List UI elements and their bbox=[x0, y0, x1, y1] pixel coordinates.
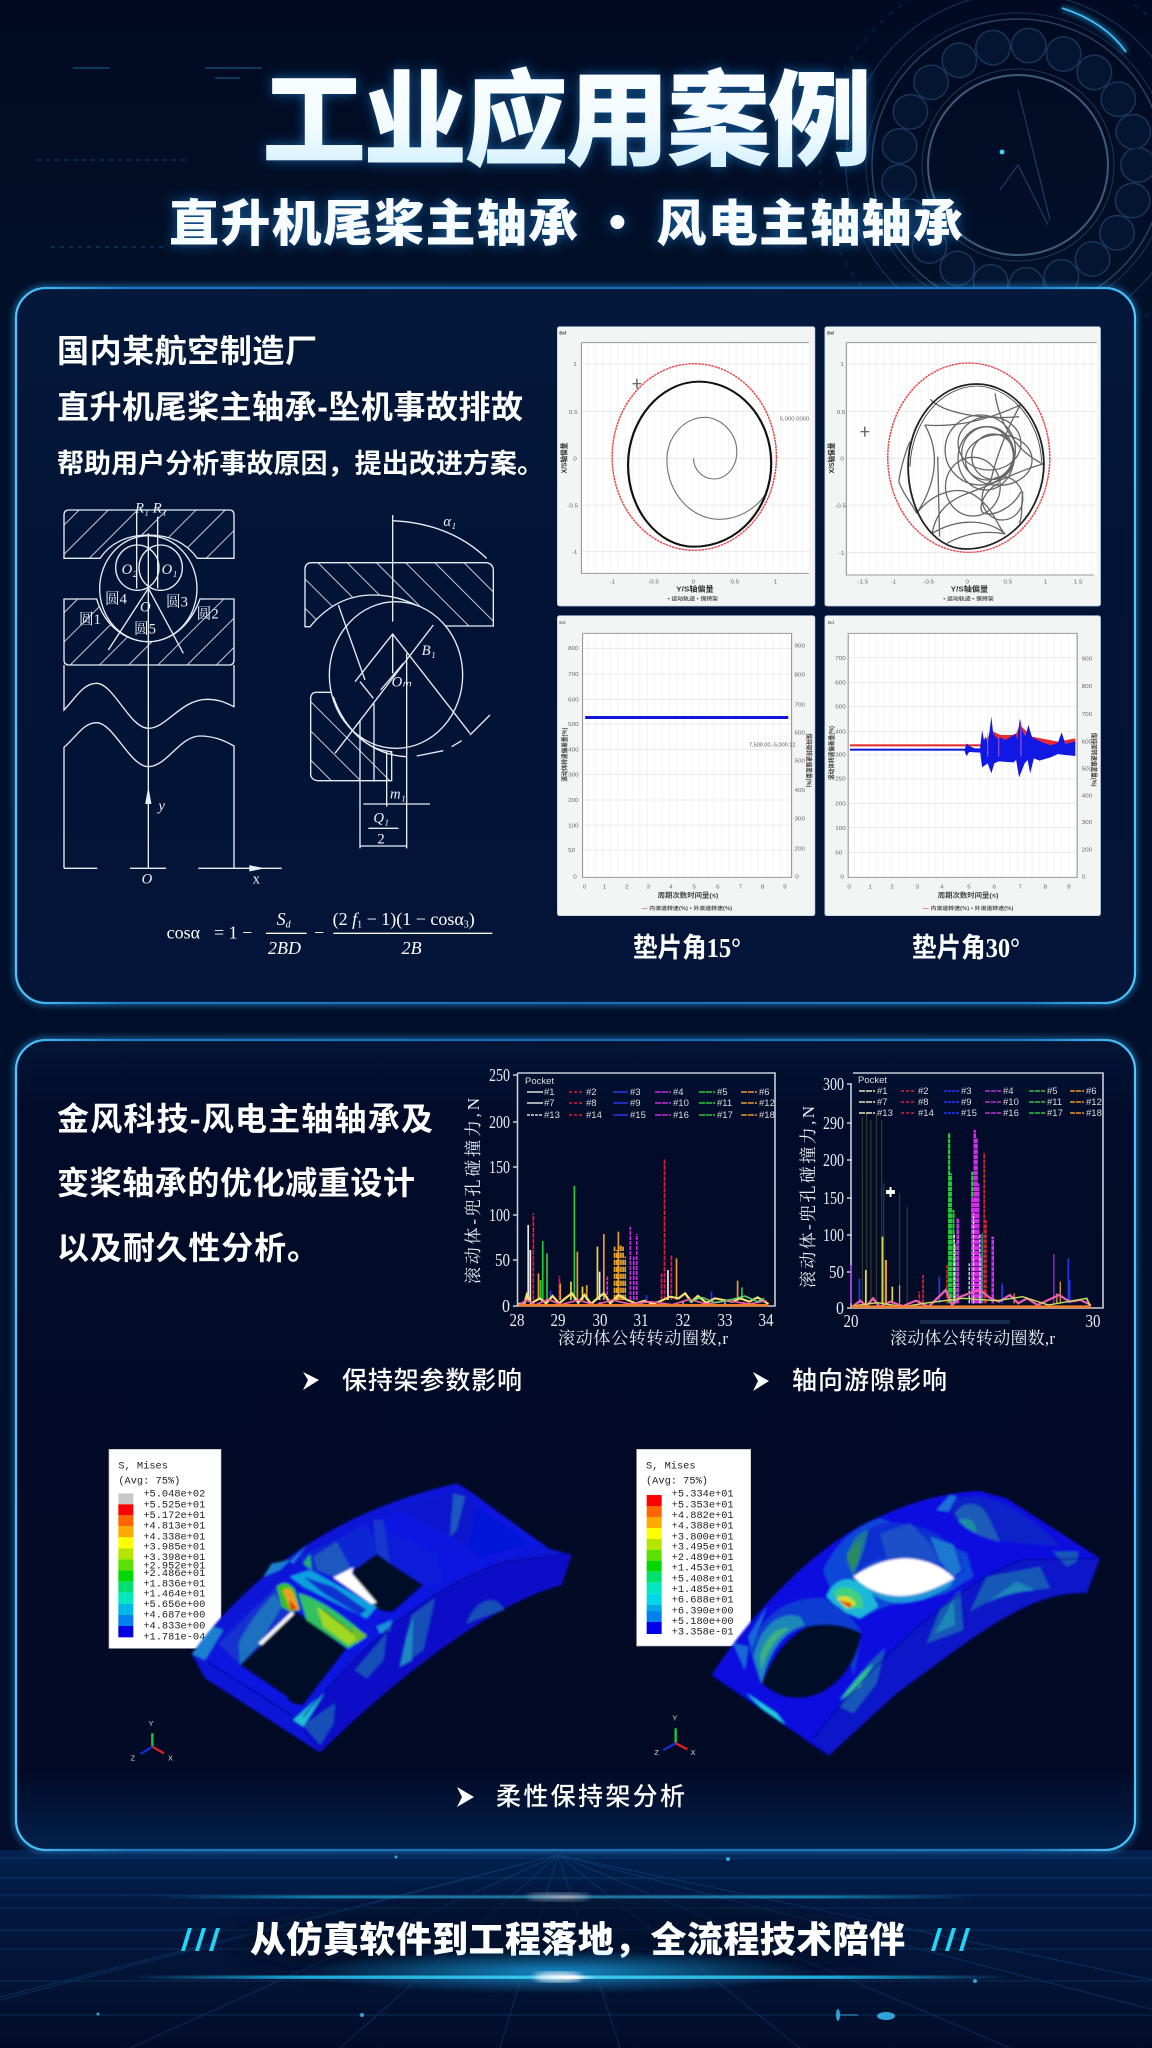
chart: cage parameter collision force: 32 bbox=[676, 1310, 690, 1330]
chart: speed trace, spacer angle 30 bbox=[825, 616, 1100, 916]
chart: speed trace, spacer angle 30: 4 bbox=[940, 885, 944, 891]
text: wind bearing description: 变桨轴承的优化减重设计 bbox=[57, 1165, 415, 1201]
chart: speed trace, spacer angle 15: 200 bbox=[568, 798, 579, 804]
chart: cage parameter collision force: #8 bbox=[586, 1098, 597, 1109]
legend: contour scale right: +1.485e+01 bbox=[672, 1584, 734, 1596]
legend: contour scale left: (Avg: 75%) bbox=[118, 1475, 180, 1487]
chart: speed trace, spacer angle 30: 8 bbox=[1044, 885, 1048, 891]
bullet: flexible cage analysis: 柔性保持架分析 bbox=[496, 1783, 685, 1811]
chart: speed trace, spacer angle 15: 2 bbox=[625, 885, 629, 891]
formula: 2BD bbox=[268, 938, 301, 958]
legend: contour scale right: +5.408e+01 bbox=[672, 1573, 734, 1585]
chart: axial clearance collision force: #11 bbox=[1047, 1097, 1062, 1108]
legend: contour scale left: +1.781e-04 bbox=[143, 1632, 205, 1644]
chart: speed trace, spacer angle 30: 50 bbox=[835, 851, 843, 857]
chart: speed trace, spacer angle 15: 0 bbox=[573, 875, 577, 880]
chart: axial clearance collision force: 滚动体公转转动圈数,r bbox=[890, 1329, 1055, 1348]
chart: axial clearance collision force: #12 bbox=[1086, 1097, 1102, 1108]
chart: cage parameter collision force: #7 bbox=[544, 1098, 555, 1109]
chart: orbit, spacer angle 30: 0 bbox=[840, 457, 845, 463]
slogan glow bbox=[228, 1898, 888, 1982]
chart: speed trace, spacer angle 30: 100 bbox=[835, 826, 846, 832]
chart: orbit, spacer angle 15: -1 bbox=[610, 580, 616, 585]
diagram: contact angle cross-section bbox=[305, 514, 493, 848]
formula: S bbox=[277, 909, 286, 929]
perspective floor grid bbox=[0, 1855, 1152, 2048]
chart: cage parameter collision force: #14 bbox=[586, 1110, 602, 1121]
legend: contour scale right: +3.495e+01 bbox=[672, 1542, 734, 1554]
chart: speed trace, spacer angle 30: 700 bbox=[1082, 712, 1093, 718]
text: wind bearing description: 以及耐久性分析。 bbox=[57, 1230, 319, 1266]
chart: cage parameter collision force: #17 bbox=[717, 1110, 733, 1121]
chart: speed trace, spacer angle 30: Bd bbox=[828, 620, 834, 626]
legend: contour scale left: +3.398e+01 bbox=[143, 1552, 205, 1564]
legend: contour scale right: +3.358e-01 bbox=[672, 1627, 734, 1639]
chart: speed trace, spacer angle 15: 0 bbox=[795, 875, 799, 880]
chart: cage parameter collision force: #13 bbox=[544, 1110, 560, 1121]
chart: orbit, spacer angle 15: -0.5 bbox=[567, 504, 579, 509]
chart: axial clearance collision force: #13 bbox=[877, 1108, 893, 1119]
chart: cage parameter collision force: 滚动体-兜孔碰撞力,N bbox=[464, 1098, 483, 1284]
chart: axial clearance collision force: #18 bbox=[1086, 1108, 1102, 1119]
heading: factory: 国内某航空制造厂 bbox=[57, 333, 317, 369]
chart: speed trace, spacer angle 15: 滚动体转速偏差量(%) bbox=[560, 728, 569, 782]
chart: orbit, spacer angle 30: -1 bbox=[891, 580, 897, 585]
diagram: bearing groove cross-section: 圆3 bbox=[166, 594, 188, 611]
chart: orbit, spacer angle 15: • 运动轨迹 • 保持架 bbox=[668, 595, 718, 603]
chart: speed trace, spacer angle 30: 300 bbox=[835, 753, 846, 759]
chart: speed trace, spacer angle 30: 3 bbox=[916, 885, 920, 891]
formula: ) bbox=[469, 909, 475, 930]
chart: cage parameter collision force: #16 bbox=[673, 1110, 689, 1121]
axis triad right bbox=[654, 1714, 696, 1757]
chart: orbit, spacer angle 30: 0.5 bbox=[1004, 580, 1013, 585]
legend: contour scale left: +5.048e+02 bbox=[143, 1489, 205, 1501]
chart: cage parameter collision force: #18 bbox=[759, 1110, 775, 1121]
formula: cosα bbox=[167, 922, 201, 942]
chart: orbit, spacer angle 30: -0.5 bbox=[923, 580, 935, 585]
chart: speed trace, spacer angle 30: 500 bbox=[835, 705, 846, 711]
chart: cage parameter collision force: 0 bbox=[502, 1296, 510, 1316]
slogan top rule bbox=[154, 1893, 977, 1901]
chart: axial clearance collision force: 50 bbox=[829, 1262, 844, 1282]
diagram: contact angle cross-section: Q₁ bbox=[373, 811, 389, 827]
legend: contour scale right: +5.353e+01 bbox=[672, 1499, 734, 1511]
chart: speed trace, spacer angle 15: 700 bbox=[795, 703, 806, 709]
chart: orbit, spacer angle 15: -1 bbox=[572, 550, 578, 556]
chart: speed trace, spacer angle 30: 周期次数时间量(s) bbox=[938, 891, 998, 899]
chart: speed trace, spacer angle 15: 300 bbox=[795, 817, 806, 823]
chart: speed trace, spacer angle 30: 400 bbox=[835, 730, 846, 735]
chart: speed trace, spacer angle 30: 5 bbox=[967, 885, 972, 891]
legend: contour scale right: +3.800e+01 bbox=[672, 1531, 734, 1543]
diagram: contact angle cross-section: 2 bbox=[377, 831, 385, 847]
icon: right slashes bbox=[931, 1928, 970, 1951]
decorative light streaks bbox=[37, 68, 262, 247]
chart: orbit, spacer angle 30: -1 bbox=[839, 551, 845, 557]
text: purpose: 帮助用户分析事故原因，提出改进方案。 bbox=[57, 442, 544, 481]
axis triad left: Z bbox=[131, 1754, 136, 1763]
text: wind bearing description bbox=[57, 1101, 433, 1266]
diagram: bearing groove cross-section bbox=[64, 501, 282, 887]
legend: contour scale left: +1.464e+01 bbox=[143, 1589, 205, 1601]
diagram: contact angle cross-section: B₁ bbox=[422, 643, 436, 659]
bullet: axial clearance influence: 轴向游隙影响 bbox=[792, 1367, 947, 1395]
chart: speed trace, spacer angle 30: 300 bbox=[1082, 820, 1093, 826]
chart: axial clearance collision force: #7 bbox=[877, 1097, 888, 1108]
chart: orbit, spacer angle 15: 0.5 bbox=[731, 580, 740, 585]
legend: contour scale right: +6.688e+01 bbox=[672, 1595, 734, 1607]
legend: contour scale left: +4.687e+00 bbox=[143, 1610, 205, 1622]
chart: speed trace, spacer angle 15: 600 bbox=[568, 698, 579, 703]
chart: cage parameter collision force: 31 bbox=[634, 1310, 648, 1330]
chart: cage parameter collision force: #11 bbox=[717, 1098, 732, 1109]
chart: axial clearance collision force: #8 bbox=[918, 1097, 929, 1108]
legend: contour scale left: +5.172e+01 bbox=[143, 1510, 205, 1522]
chart: cage parameter collision force: #2 bbox=[586, 1087, 597, 1098]
chart: speed trace, spacer angle 15: 300 bbox=[568, 773, 579, 779]
chart: axial clearance collision force: #10 bbox=[1003, 1097, 1019, 1108]
chart: speed trace, spacer angle 30: 600 bbox=[835, 681, 846, 687]
chart: axial clearance collision force: 20 bbox=[844, 1311, 858, 1331]
legend: contour scale right: +1.453e+01 bbox=[672, 1563, 734, 1575]
legend: contour scale left: +5.656e+00 bbox=[143, 1599, 205, 1611]
chart: cage parameter collision force: #15 bbox=[630, 1110, 646, 1121]
text: wind bearing description: 金风科技-风电主轴轴承及 bbox=[57, 1101, 433, 1137]
chart: speed trace, spacer angle 30: 900 bbox=[1082, 657, 1093, 663]
chart: orbit, spacer angle 30: • 运动轨迹 • 保持架 bbox=[943, 595, 994, 603]
chart: speed trace, spacer angle 30: 2 bbox=[890, 885, 895, 891]
legend: contour scale right: +4.882e+01 bbox=[672, 1510, 734, 1522]
formula: 1 bbox=[357, 920, 362, 931]
title: 工业应用案例 bbox=[262, 36, 872, 187]
chart: speed trace, spacer angle 30: 250 bbox=[835, 777, 846, 783]
legend: contour scale left: S, Mises bbox=[118, 1461, 168, 1473]
chart: orbit, spacer angle 30: 1.5 bbox=[1074, 580, 1083, 585]
chart: speed trace, spacer angle 30: 0 bbox=[840, 875, 845, 880]
legend: contour scale left: +4.813e+01 bbox=[143, 1521, 205, 1533]
chart: cage parameter collision force: Pocket bbox=[525, 1076, 554, 1087]
axis triad left bbox=[131, 1719, 173, 1763]
chart: speed trace, spacer angle 30: 1 bbox=[869, 885, 873, 891]
chart: orbit, spacer angle 15: X/S轴偏量 bbox=[559, 443, 569, 473]
chart: speed trace, spacer angle 30: 滚动体转速偏差量(%) bbox=[827, 726, 835, 780]
chart: orbit, spacer angle 30: 0.5 bbox=[837, 410, 846, 416]
axis triad left: X bbox=[168, 1754, 173, 1763]
diagram: bearing groove cross-section: 圆4 bbox=[105, 590, 128, 607]
chart: speed trace, spacer angle 30: 7 bbox=[1018, 885, 1023, 891]
legend: contour scale left: +4.833e+00 bbox=[143, 1620, 205, 1632]
chart: speed trace, spacer angle 30: 保持架转速偏差量(%) bbox=[1090, 733, 1098, 787]
chart: axial clearance collision force: #2 bbox=[918, 1086, 929, 1097]
chart: orbit, spacer angle 30: X/S轴偏量 bbox=[827, 443, 836, 473]
axis triad right: X bbox=[691, 1748, 696, 1757]
chart: cage parameter collision force: #4 bbox=[673, 1087, 684, 1098]
chart: cage parameter collision force: 28 bbox=[510, 1310, 524, 1330]
chart: orbit, spacer angle 15: 5,000 0000 bbox=[780, 417, 809, 423]
slogan bottom rule bbox=[130, 1950, 1010, 1994]
chart: speed trace, spacer angle 15: 5 bbox=[692, 885, 697, 891]
diagram: bearing groove cross-section: O bbox=[142, 871, 153, 887]
chart: orbit, spacer angle 30 bbox=[825, 327, 1100, 606]
chart: axial clearance collision force: #6 bbox=[1086, 1086, 1097, 1097]
chart: orbit, spacer angle 15: 1 bbox=[573, 362, 577, 368]
slogan: 从仿真软件到工程落地，全流程技术陪伴 bbox=[250, 1911, 905, 1963]
chart: speed trace, spacer angle 15: 400 bbox=[568, 748, 579, 753]
chart: cage parameter collision force: #3 bbox=[630, 1087, 641, 1098]
chart: speed trace, spacer angle 15: 700 bbox=[568, 672, 579, 678]
chart: speed trace, spacer angle 15: 800 bbox=[795, 673, 806, 679]
chart: speed trace, spacer angle 15: 8 bbox=[761, 885, 765, 891]
formula: = 1 − bbox=[214, 922, 252, 942]
chart: speed trace, spacer angle 15: 600 bbox=[795, 731, 806, 737]
caption: spacer angle 15: 垫片角15° bbox=[633, 933, 741, 963]
icon: left slashes bbox=[181, 1928, 220, 1951]
chart: axial clearance collision force: 0 bbox=[836, 1298, 844, 1318]
chart: speed trace, spacer angle 15: 保持架转速偏差量(%) bbox=[805, 733, 813, 787]
legend: contour scale left: +3.985e+01 bbox=[143, 1542, 205, 1554]
caption: spacer angle 30: 垫片角30° bbox=[912, 933, 1020, 963]
panel: helicopter bearing case bbox=[16, 288, 1135, 1003]
legend: contour scale left: +2.952e+01 bbox=[143, 1561, 205, 1573]
chart: axial clearance collision force: 30 bbox=[1086, 1311, 1100, 1331]
chart: orbit, spacer angle 15: -0.5 bbox=[648, 580, 660, 585]
chart: speed trace, spacer angle 30: 500 bbox=[1082, 767, 1093, 773]
legend: contour scale right: +2.489e+01 bbox=[672, 1552, 734, 1564]
chart: axial clearance collision force: #3 bbox=[961, 1086, 972, 1097]
formula: 2B bbox=[402, 938, 422, 958]
chart: speed trace, spacer angle 15: 200 bbox=[795, 847, 806, 853]
bullet: cage parameter influence: 保持架参数影响 bbox=[342, 1367, 522, 1395]
chart: orbit, spacer angle 15 bbox=[557, 327, 815, 606]
chart: speed trace, spacer angle 30: 700 bbox=[835, 656, 846, 662]
chart: speed trace, spacer angle 15: 6 bbox=[716, 885, 720, 891]
axis triad left: Y bbox=[149, 1719, 154, 1728]
chart: speed trace, spacer angle 30: 9 bbox=[1067, 885, 1071, 891]
chart: speed trace, spacer angle 15 bbox=[557, 616, 815, 916]
chart: speed trace, spacer angle 15: 900 bbox=[795, 644, 806, 649]
chart: cage parameter collision force: #6 bbox=[759, 1087, 770, 1098]
formula: 3 bbox=[464, 920, 469, 931]
chart: axial clearance collision force: #15 bbox=[961, 1108, 977, 1119]
subtitle: 直升机尾桨主轴承 · 风电主轴轴承 bbox=[169, 184, 963, 256]
chart: speed trace, spacer angle 15: 1 bbox=[603, 885, 607, 891]
cage body right bbox=[712, 1491, 1100, 1756]
chart: cage parameter collision force: 200 bbox=[489, 1112, 510, 1132]
chart: speed trace, spacer angle 15: Bd bbox=[559, 620, 566, 626]
chart: speed trace, spacer angle 15: 4 bbox=[669, 885, 673, 891]
diagram: bearing groove cross-section: 圆1 bbox=[79, 611, 101, 628]
formula: − bbox=[314, 922, 324, 942]
chart: speed trace, spacer angle 15: 7,500.00,-5,000.12 bbox=[749, 743, 796, 749]
heading: accident investigation: 直升机尾桨主轴承-坠机事故排故 bbox=[57, 389, 523, 425]
chart: speed trace, spacer angle 15: 100 bbox=[568, 824, 579, 829]
chart: speed trace, spacer angle 15: 9 bbox=[783, 885, 787, 891]
chart: cage parameter collision force: 34 bbox=[758, 1310, 774, 1330]
chart: orbit, spacer angle 30: -1.5 bbox=[857, 580, 869, 585]
chart: speed trace, spacer angle 15: — 内滚道转速(%) • 外滚道转速(%) bbox=[642, 904, 732, 912]
chart: orbit, spacer angle 15: Bd bbox=[559, 331, 566, 337]
chart: speed trace, spacer angle 30: 600 bbox=[1082, 740, 1093, 745]
chart: axial clearance collision force: 100 bbox=[823, 1225, 844, 1245]
chart: speed trace, spacer angle 30: 6 bbox=[992, 885, 997, 891]
chart: cage parameter collision force: 33 bbox=[718, 1310, 732, 1330]
chart: cage parameter collision force: 50 bbox=[495, 1250, 510, 1270]
chart: cage parameter collision force: #10 bbox=[673, 1098, 689, 1109]
chart: cage parameter collision force: #5 bbox=[717, 1087, 728, 1098]
chart: axial clearance collision force: #1 bbox=[877, 1086, 888, 1097]
chart: speed trace, spacer angle 30: 200 bbox=[835, 802, 846, 807]
chart: orbit, spacer angle 15: 0 bbox=[692, 580, 696, 585]
chart: cage parameter collision force: 150 bbox=[489, 1157, 510, 1177]
axis triad right: Z bbox=[654, 1748, 659, 1757]
chart: axial clearance collision force: #14 bbox=[918, 1108, 934, 1119]
chart: axial clearance collision force: Pocket bbox=[858, 1075, 887, 1086]
legend: contour scale right: +6.390e+00 bbox=[672, 1605, 734, 1617]
chart: orbit, spacer angle 15: Y/S轴偏量 bbox=[676, 584, 714, 593]
chart: cage parameter collision force: #9 bbox=[630, 1098, 641, 1109]
floor background bbox=[0, 1850, 1152, 2048]
chart: cage parameter collision force: 29 bbox=[550, 1310, 566, 1330]
formula bbox=[167, 909, 492, 958]
chart: cage parameter collision force bbox=[464, 1065, 775, 1348]
decorative bearing graphic bbox=[820, 0, 1152, 363]
chart: orbit, spacer angle 30: 1 bbox=[1044, 580, 1048, 585]
chart: cage parameter collision force: 100 bbox=[489, 1205, 510, 1225]
legend: contour scale left bbox=[109, 1449, 221, 1648]
diagram: contact angle cross-section: Oₘ bbox=[392, 675, 412, 691]
chart: cage parameter collision force: 250 bbox=[489, 1065, 510, 1085]
legend: contour scale right bbox=[637, 1449, 751, 1646]
axis triad right: Y bbox=[672, 1714, 677, 1723]
chart: axial clearance collision force: #17 bbox=[1047, 1108, 1063, 1119]
legend: contour scale left: +1.836e+01 bbox=[143, 1579, 205, 1591]
chart: speed trace, spacer angle 15: 3 bbox=[647, 885, 651, 891]
chart: speed trace, spacer angle 15: 0 bbox=[583, 885, 587, 891]
formula: − 1)(1 − cosα bbox=[362, 909, 464, 930]
formula: (2 f bbox=[333, 909, 357, 929]
panel: wind turbine bearing case bbox=[16, 1040, 1135, 1850]
diagram: bearing groove cross-section: y bbox=[156, 799, 165, 815]
chart: axial clearance collision force: #5 bbox=[1047, 1086, 1058, 1097]
chart: orbit, spacer angle 30: Y/S轴偏量 bbox=[951, 584, 988, 593]
chart: speed trace, spacer angle 30: 0 bbox=[1082, 875, 1086, 880]
chart: speed trace, spacer angle 30: 200 bbox=[1082, 848, 1093, 853]
chart: cage parameter collision force: 滚动体公转转动圈数,r bbox=[558, 1329, 728, 1348]
chart: orbit, spacer angle 15: 0 bbox=[573, 457, 577, 463]
chart: cage parameter collision force: #12 bbox=[759, 1098, 775, 1109]
legend: contour scale right: +5.334e+01 bbox=[672, 1489, 734, 1501]
chart: speed trace, spacer angle 15: 50 bbox=[568, 848, 576, 854]
chart: orbit, spacer angle 30: 1 bbox=[840, 362, 845, 368]
chart: speed trace, spacer angle 15: 400 bbox=[795, 788, 806, 794]
chart: axial clearance collision force: #4 bbox=[1003, 1086, 1014, 1097]
diagram: bearing groove cross-section: 圆5 bbox=[134, 620, 156, 637]
diagram: bearing groove cross-section: O₂ bbox=[122, 562, 137, 578]
chart: speed trace, spacer angle 30: 800 bbox=[1082, 684, 1093, 690]
legend: contour scale right: S, Mises bbox=[646, 1461, 696, 1473]
chart: orbit, spacer angle 30: -0.5 bbox=[835, 504, 847, 509]
chart: speed trace, spacer angle 30: 400 bbox=[1082, 794, 1093, 799]
chart: cage parameter collision force: #1 bbox=[544, 1087, 555, 1098]
chart: axial clearance collision force: 290 bbox=[823, 1113, 844, 1133]
chart: orbit, spacer angle 15: 0.5 bbox=[569, 410, 578, 416]
chart: axial clearance collision force: 150 bbox=[823, 1188, 844, 1208]
chart: orbit, spacer angle 30: 0 bbox=[965, 580, 970, 585]
chart: speed trace, spacer angle 30: 0 bbox=[847, 885, 852, 891]
diagram: bearing groove cross-section: O₁ bbox=[162, 562, 177, 578]
legend: contour scale left: +5.525e+01 bbox=[143, 1499, 205, 1511]
legend: contour scale right: +5.180e+00 bbox=[672, 1616, 734, 1628]
chart: speed trace, spacer angle 15: 周期次数时间量(s) bbox=[658, 891, 718, 899]
figure: flexible cage stress contour bbox=[637, 1449, 1100, 1757]
legend: contour scale left: +4.338e+01 bbox=[143, 1531, 205, 1543]
diagram: contact angle cross-section: m₁ bbox=[390, 786, 406, 802]
figure: windowed cage stress contour bbox=[109, 1449, 572, 1763]
cage body left bbox=[192, 1483, 572, 1753]
diagram: bearing groove cross-section: O bbox=[140, 600, 151, 616]
chart: axial clearance collision force: 200 bbox=[823, 1150, 844, 1170]
diagram: contact angle cross-section: α₁ bbox=[443, 514, 456, 530]
legend: contour scale right: (Avg: 75%) bbox=[646, 1475, 708, 1487]
diagram: bearing groove cross-section: 圆2 bbox=[197, 605, 219, 622]
formula: d bbox=[286, 920, 292, 931]
chart: speed trace, spacer angle 30: — 内滚道转速(%) • 外滚道转速(%) bbox=[923, 904, 1013, 912]
legend: contour scale left: +2.486e+01 bbox=[143, 1568, 205, 1580]
chart: cage parameter collision force: 30 bbox=[592, 1310, 608, 1330]
chart: axial clearance collision force: #9 bbox=[961, 1097, 972, 1108]
chart: orbit, spacer angle 15: 1 bbox=[774, 580, 778, 585]
chart: axial clearance collision force bbox=[799, 1073, 1103, 1348]
chart: speed trace, spacer angle 15: 800 bbox=[568, 646, 579, 652]
legend: contour scale right: +4.388e+01 bbox=[672, 1521, 734, 1533]
chart: axial clearance collision force: 300 bbox=[823, 1074, 844, 1094]
chart: speed trace, spacer angle 15: 7 bbox=[739, 885, 743, 891]
chart: axial clearance collision force: #16 bbox=[1003, 1108, 1019, 1119]
diagram: bearing groove cross-section: R₁ R₁ bbox=[134, 501, 167, 517]
sparkles bbox=[96, 1856, 977, 2021]
chart: axial clearance collision force: 滚动体-兜孔碰撞力,N bbox=[799, 1106, 818, 1288]
diagram: bearing groove cross-section: x bbox=[253, 871, 261, 887]
chart: speed trace, spacer angle 15: 500 bbox=[795, 759, 806, 765]
chart: speed trace, spacer angle 15: 500 bbox=[568, 722, 579, 728]
chart: orbit, spacer angle 30: Bd bbox=[827, 331, 834, 337]
